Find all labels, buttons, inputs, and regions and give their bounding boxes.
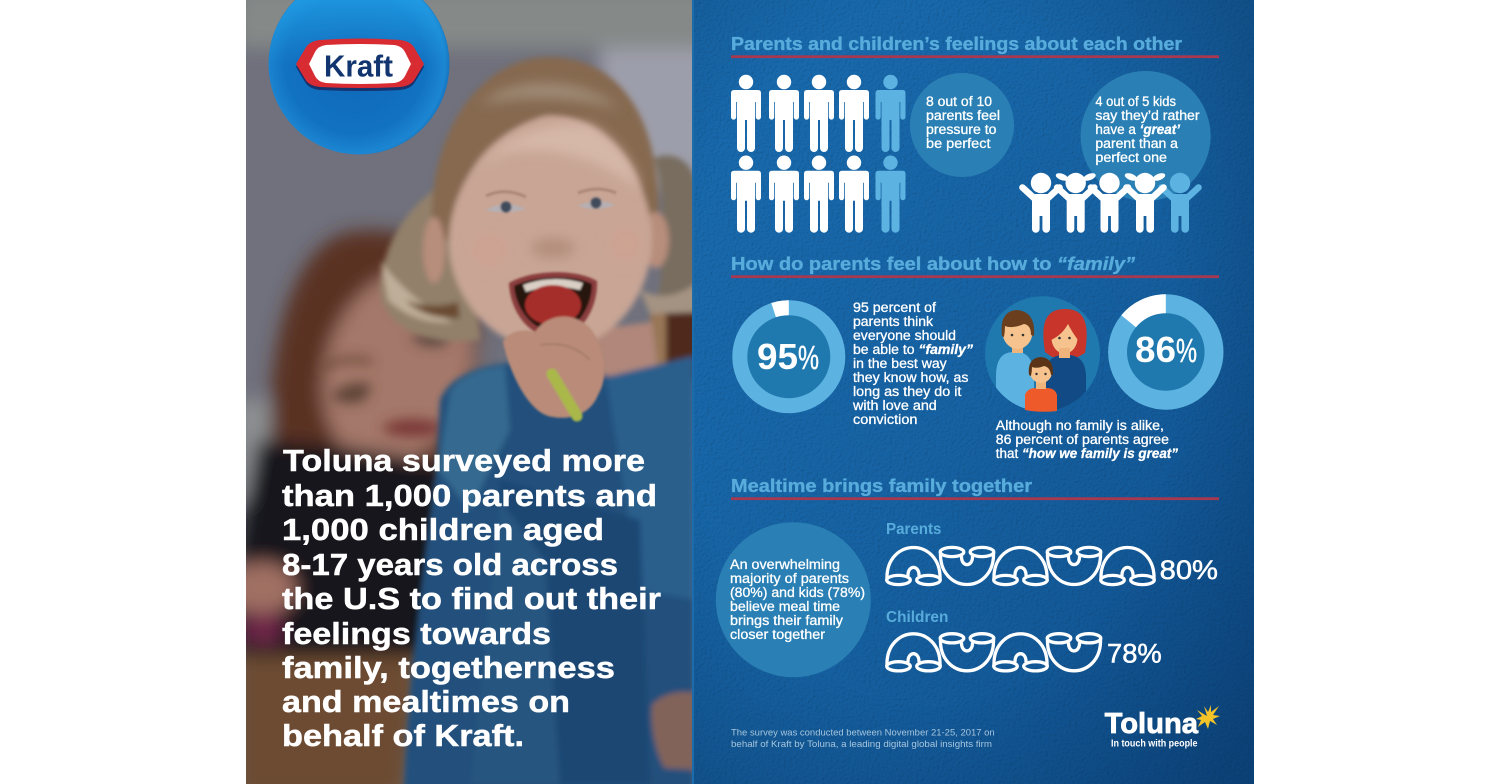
macaroni bar: parents 80 percent xyxy=(887,547,1154,585)
callout: mealtime majority: majority of parents xyxy=(730,571,849,586)
neck xyxy=(590,322,658,385)
value: 80 percent: 80% xyxy=(1160,555,1218,585)
donut chart: 95 percent xyxy=(732,300,845,413)
callout: parents feel pressure: pressure to xyxy=(926,122,996,137)
logo: Toluna: Toluna xyxy=(1105,708,1199,740)
text block: 95 percent: in the best way xyxy=(853,356,947,371)
text block: 86 percent xyxy=(996,418,1178,461)
callout: mealtime majority: closer together xyxy=(730,627,826,642)
panel: blue textured background xyxy=(694,0,1254,784)
logo: Kraft plate: Kraft xyxy=(324,48,393,84)
callout: mealtime majority xyxy=(716,522,871,677)
lead text block: 1,000 children aged xyxy=(282,512,604,547)
callout: kids want a great parent: say they’d rather xyxy=(1095,108,1200,123)
face xyxy=(449,116,652,350)
callout: parents feel pressure: be perfect xyxy=(926,136,991,151)
lead text block: than 1,000 parents and xyxy=(282,478,657,513)
donut chart: 95 percent: 95 xyxy=(757,336,798,377)
callout: kids want a great parent: perfect one xyxy=(1095,150,1167,165)
man xyxy=(996,310,1034,420)
heading: mealtime: Mealtime brings family together xyxy=(731,476,1032,496)
panel: photo of laughing child and mother xyxy=(228,0,710,784)
callout: mealtime majority: An overwhelming xyxy=(730,557,840,572)
text block: 95 percent xyxy=(852,300,973,427)
text block: 86 percent: 86 percent of parents agree xyxy=(996,432,1169,447)
callout: parents feel pressure: parents feel xyxy=(926,108,1000,123)
footnote xyxy=(731,728,995,750)
text block: 95 percent: be able to “family” xyxy=(853,342,973,357)
callout: mealtime majority: (80%) and kids (78%) xyxy=(730,585,865,600)
child xyxy=(1025,357,1057,412)
lead text block: family, togetherness xyxy=(282,650,615,685)
callout: parents feel pressure xyxy=(910,73,1014,177)
background right of child xyxy=(662,310,692,378)
label: children: Children xyxy=(886,609,948,626)
label: parents: Parents xyxy=(886,521,941,538)
hair xyxy=(431,57,659,240)
footnote: The survey was conducted between November 21-25, 2017 on xyxy=(731,728,995,738)
callout: mealtime majority: believe meal time xyxy=(730,599,840,614)
logo: Kraft plate xyxy=(268,0,450,154)
ears xyxy=(423,217,445,283)
lead text block: Toluna surveyed more xyxy=(283,443,645,478)
text block: 95 percent: they know how, as xyxy=(853,370,969,385)
text block: 95 percent: everyone should xyxy=(853,328,956,343)
text block: 95 percent: with love and xyxy=(852,398,937,413)
logo: Toluna: In touch with people xyxy=(1111,738,1198,750)
lead text block: and mealtimes on xyxy=(282,684,570,719)
heading: feelings about each other: Parents and children’s feelings about each other xyxy=(731,34,1182,54)
text block: 95 percent: 95 percent of xyxy=(853,300,936,315)
donut chart: 86 percent xyxy=(1108,294,1224,410)
lead text block: feelings towards xyxy=(282,616,551,651)
right pigtail xyxy=(652,152,692,297)
heading: how to family: How do parents feel about how to “family” xyxy=(731,254,1135,274)
text block: 95 percent: parents think xyxy=(853,314,933,329)
value: 78 percent: 78% xyxy=(1107,638,1162,668)
lead text block: behalf of Kraft. xyxy=(282,718,524,753)
text block: 95 percent: long as they do it xyxy=(853,384,962,399)
lead text block: the U.S to find out their xyxy=(282,581,661,616)
macaroni bar: children 78 percent xyxy=(887,634,1101,671)
icon: family illustration xyxy=(985,296,1100,420)
lead text block xyxy=(282,443,661,753)
callout: kids want a great parent: 4 out of 5 kids xyxy=(1095,94,1176,109)
woman xyxy=(1043,309,1087,420)
lead text block: 8-17 years old across xyxy=(282,547,618,582)
denim xyxy=(404,356,694,784)
callout: kids want a great parent xyxy=(1081,71,1211,201)
donut chart: 86 percent: % xyxy=(1176,332,1197,369)
footnote: behalf of Kraft by Toluna, a leading digital global insights firm xyxy=(731,739,992,750)
callout: parents feel pressure: 8 out of 10 xyxy=(926,94,992,109)
callout: mealtime majority: brings their family xyxy=(730,613,843,628)
pictogram: 8 of 10 parents xyxy=(731,75,906,233)
donut chart: 95 percent: % xyxy=(798,339,819,376)
text block: 86 percent: Although no family is alike, xyxy=(996,418,1164,433)
left pigtail xyxy=(380,177,480,341)
pictogram: 4 of 5 kids xyxy=(1022,172,1198,233)
callout: kids want a great parent: have a ‘great’ xyxy=(1095,122,1180,137)
callout: kids want a great parent: parent than a xyxy=(1095,136,1178,151)
text block: 86 percent: that “how we family is great” xyxy=(996,446,1178,461)
donut chart: 86 percent: 86 xyxy=(1135,329,1176,370)
logo: Toluna xyxy=(1105,705,1220,750)
text block: 95 percent: conviction xyxy=(853,412,918,427)
edge strip xyxy=(692,0,694,784)
